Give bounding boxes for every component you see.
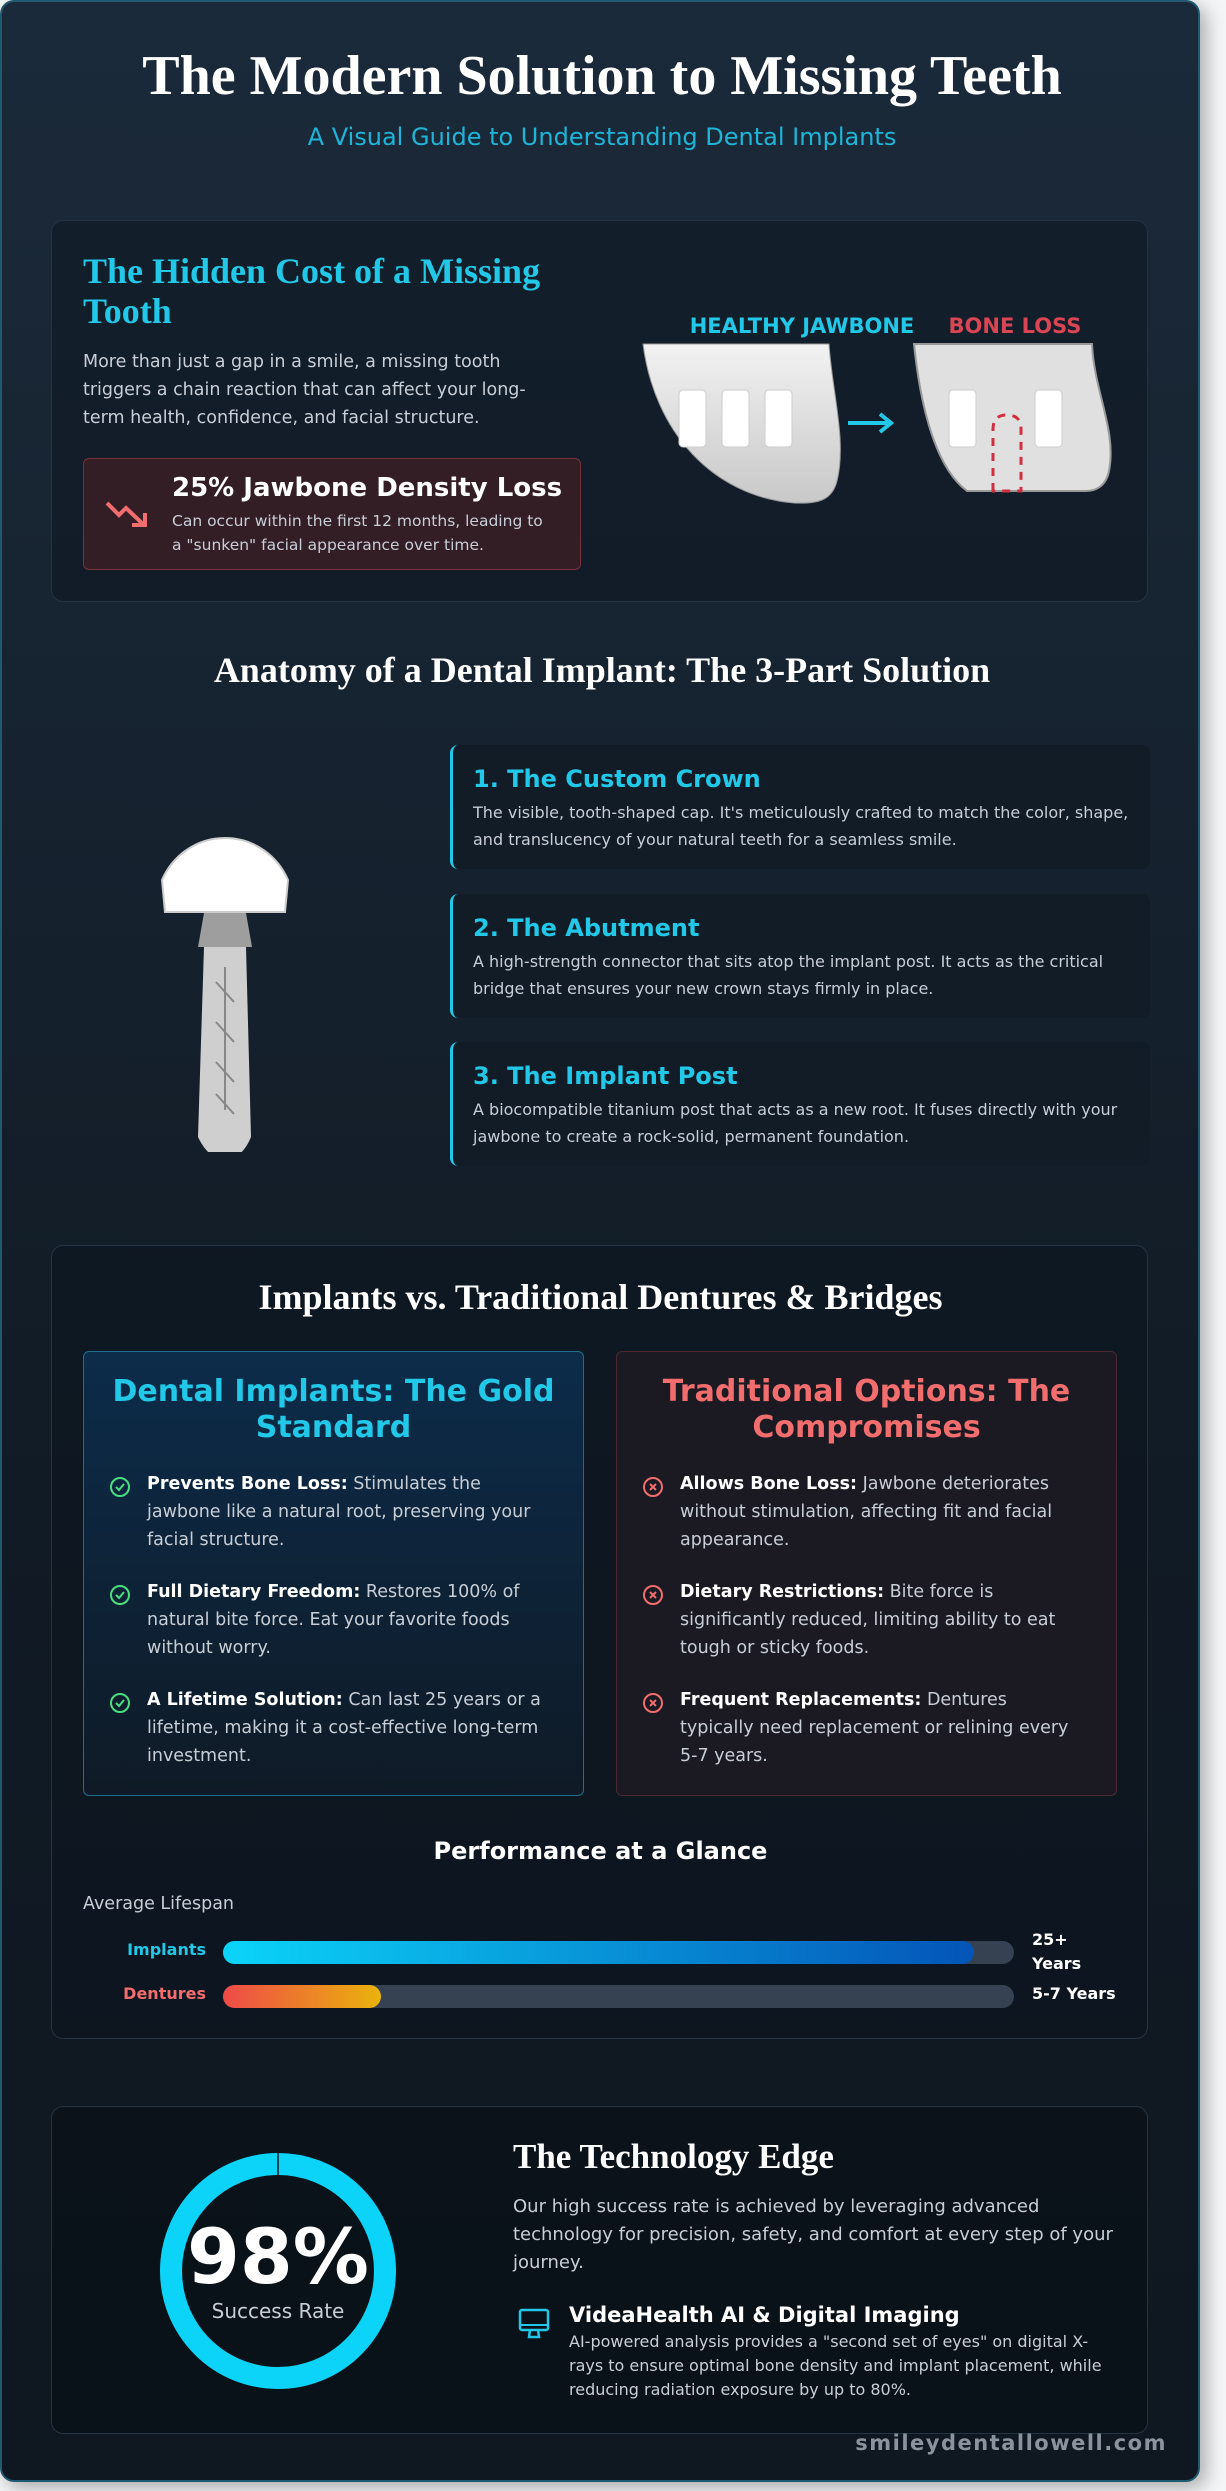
card: post [450,1042,1150,1166]
callout title: 25% Jawbone Density Loss [172,473,562,503]
icon: trend down [106,502,147,527]
card: abutment: A high-strength connector that sits atop the implant post. It acts as the critical bridge that ensures your new crown stays firmly in place. [473,952,1103,998]
item: Dietary Restrictions: Bite force is significantly reduced, limiting ability to eat tough or sticky foods. [680,1582,1055,1658]
card: abutment [450,894,1150,1018]
illustration: implant [161,837,289,1152]
item: Full Dietary Freedom: Restores 100% of natural bite force. Eat your favorite foods without worry. [147,1582,519,1658]
item: Allows Bone Loss: Jawbone deteriorates without stimulation, affecting fit and facial appearance. [680,1474,1052,1550]
paragraph: technology: Our high success rate is achieved by leveraging advanced technology for precision, safety, and comfort at every step of your journey. [513,2196,1113,2273]
label: average lifespan: Average Lifespan [83,1894,234,1914]
chart: success ring: 98% [187,2212,369,2301]
subtitle: A Visual Guide to Understanding Dental Implants [308,123,896,151]
bar chart: lifespan: 5-7 Years [1032,1984,1116,2003]
card: post: 3. The Implant Post [473,1062,738,1090]
heading: gold standard: Dental Implants: The Gold Standard [113,1374,554,1445]
item: Prevents Bone Loss: Stimulates the jawbone like a natural root, preserving your facial structure. [147,1474,530,1550]
card: traditional [616,1351,1117,1796]
paragraph: More than just a gap in a smile, a missing tooth triggers a chain reaction that can affect your long-term health, confidence, and facial structure. [83,352,526,428]
feature: videahealth: VideaHealth AI & Digital Imaging [569,2303,960,2327]
callout text: Can occur within the first 12 months, leading to a "sunken" facial appearance over time. [172,512,543,554]
bar chart: lifespan [123,1930,1116,2008]
chart: success ring: Success Rate [212,2299,344,2323]
heading: performance: Performance at a Glance [434,1837,767,1865]
card: implants [83,1351,584,1796]
bar chart: lifespan: Dentures [123,1984,206,2003]
item: Frequent Replacements: Dentures typically need replacement or relining every 5-7 years. [680,1690,1068,1766]
card: abutment: 2. The Abutment [473,914,699,942]
bar chart: lifespan: Years [1032,1954,1081,1973]
title: The Modern Solution to Missing Teeth [142,45,1062,107]
heading: compromises: Traditional Options: The Compromises [663,1374,1070,1445]
chart: success ring [160,2153,396,2389]
panel: technology [51,2106,1148,2434]
card: post: A biocompatible titanium post that acts as a new root. It fuses directly with your jawbone to create a rock-solid, permanent foundation. [473,1100,1117,1146]
item: A Lifetime Solution: Can last 25 years or a lifetime, making it a cost-effective long-term investment. [147,1690,541,1766]
panel: hidden cost [51,220,1148,602]
heading: hidden cost: The Hidden Cost of a Missing Tooth [83,251,540,331]
bar chart: lifespan: 25+ [1032,1930,1068,1949]
feature: videahealth [569,2303,1102,2399]
card: crown: The visible, tooth-shaped cap. It's meticulously crafted to match the color, shape, and translucency of your natural teeth for a seamless smile. [473,803,1128,849]
bar chart: lifespan: Implants [127,1940,206,1959]
heading: comparison: Implants vs. Traditional Dentures & Bridges [258,1277,943,1317]
heading: technology edge: The Technology Edge [513,2137,834,2176]
diagram: jawbone comparison: HEALTHY JAWBONE [690,314,914,338]
diagram: jawbone comparison [642,314,1112,504]
card: crown: 1. The Custom Crown [473,765,761,793]
heading: anatomy: Anatomy of a Dental Implant: The 3-Part Solution [214,650,990,690]
panel: comparison [51,1245,1148,2039]
callout: density loss [83,458,581,570]
diagram: jawbone comparison: BONE LOSS [949,314,1081,338]
footer: website: smileydentallowell.com [855,2431,1167,2455]
icon: monitor [518,2308,550,2338]
feature: videahealth: AI-powered analysis provides a "second set of eyes" on digital X-rays to ensure optimal bone density and implant placement, while reducing radiation exposure by up to 80%. [569,2332,1102,2399]
card: crown [450,745,1150,869]
